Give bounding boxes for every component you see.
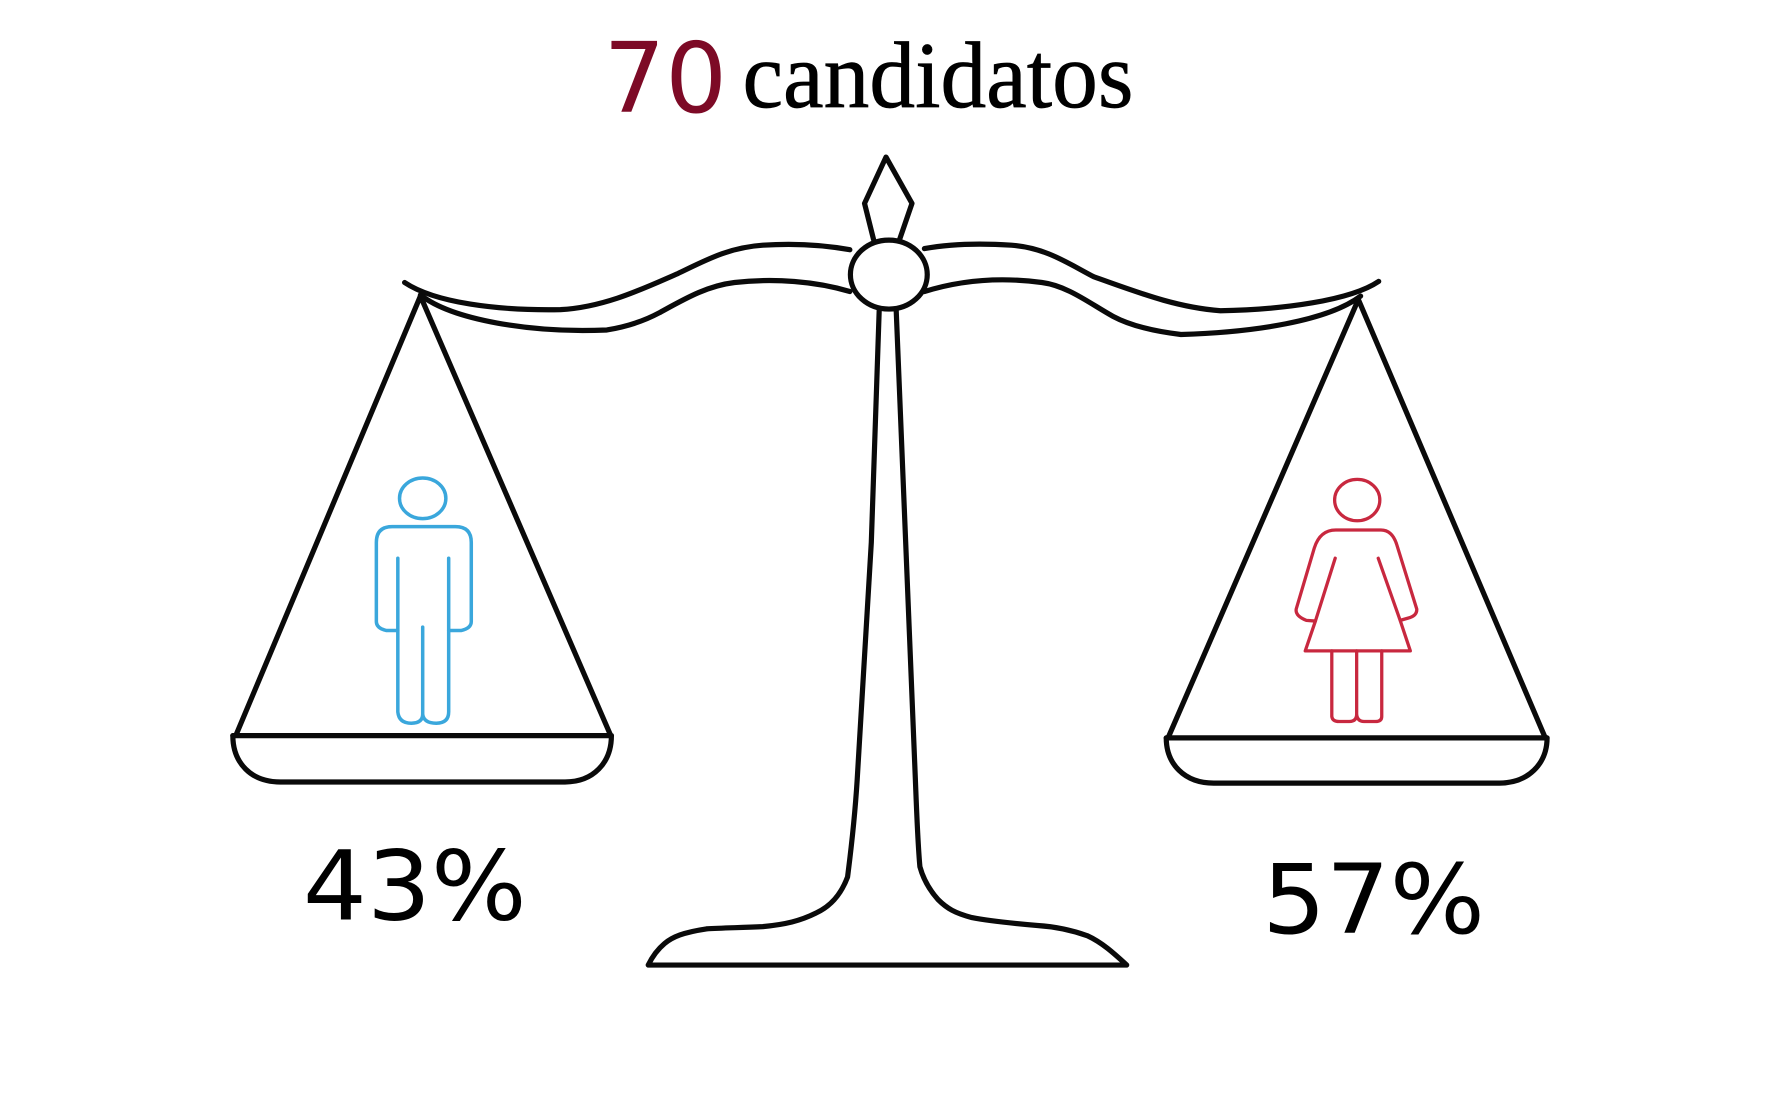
scale column and base — [648, 310, 1127, 965]
balance scale structure — [233, 157, 1547, 965]
title number: 70 — [603, 22, 727, 135]
scale finial — [865, 157, 912, 240]
left pan — [233, 296, 611, 782]
women percentage: 57% — [1262, 844, 1485, 956]
scale pivot — [850, 240, 927, 309]
scale beam — [405, 244, 1379, 334]
right pan — [1166, 299, 1547, 783]
men percentage: 43% — [303, 830, 527, 942]
icon: man — [376, 478, 471, 723]
title: 70 candidatos — [603, 22, 1133, 135]
title word: candidatos — [742, 24, 1133, 128]
icon: woman — [1296, 479, 1417, 722]
